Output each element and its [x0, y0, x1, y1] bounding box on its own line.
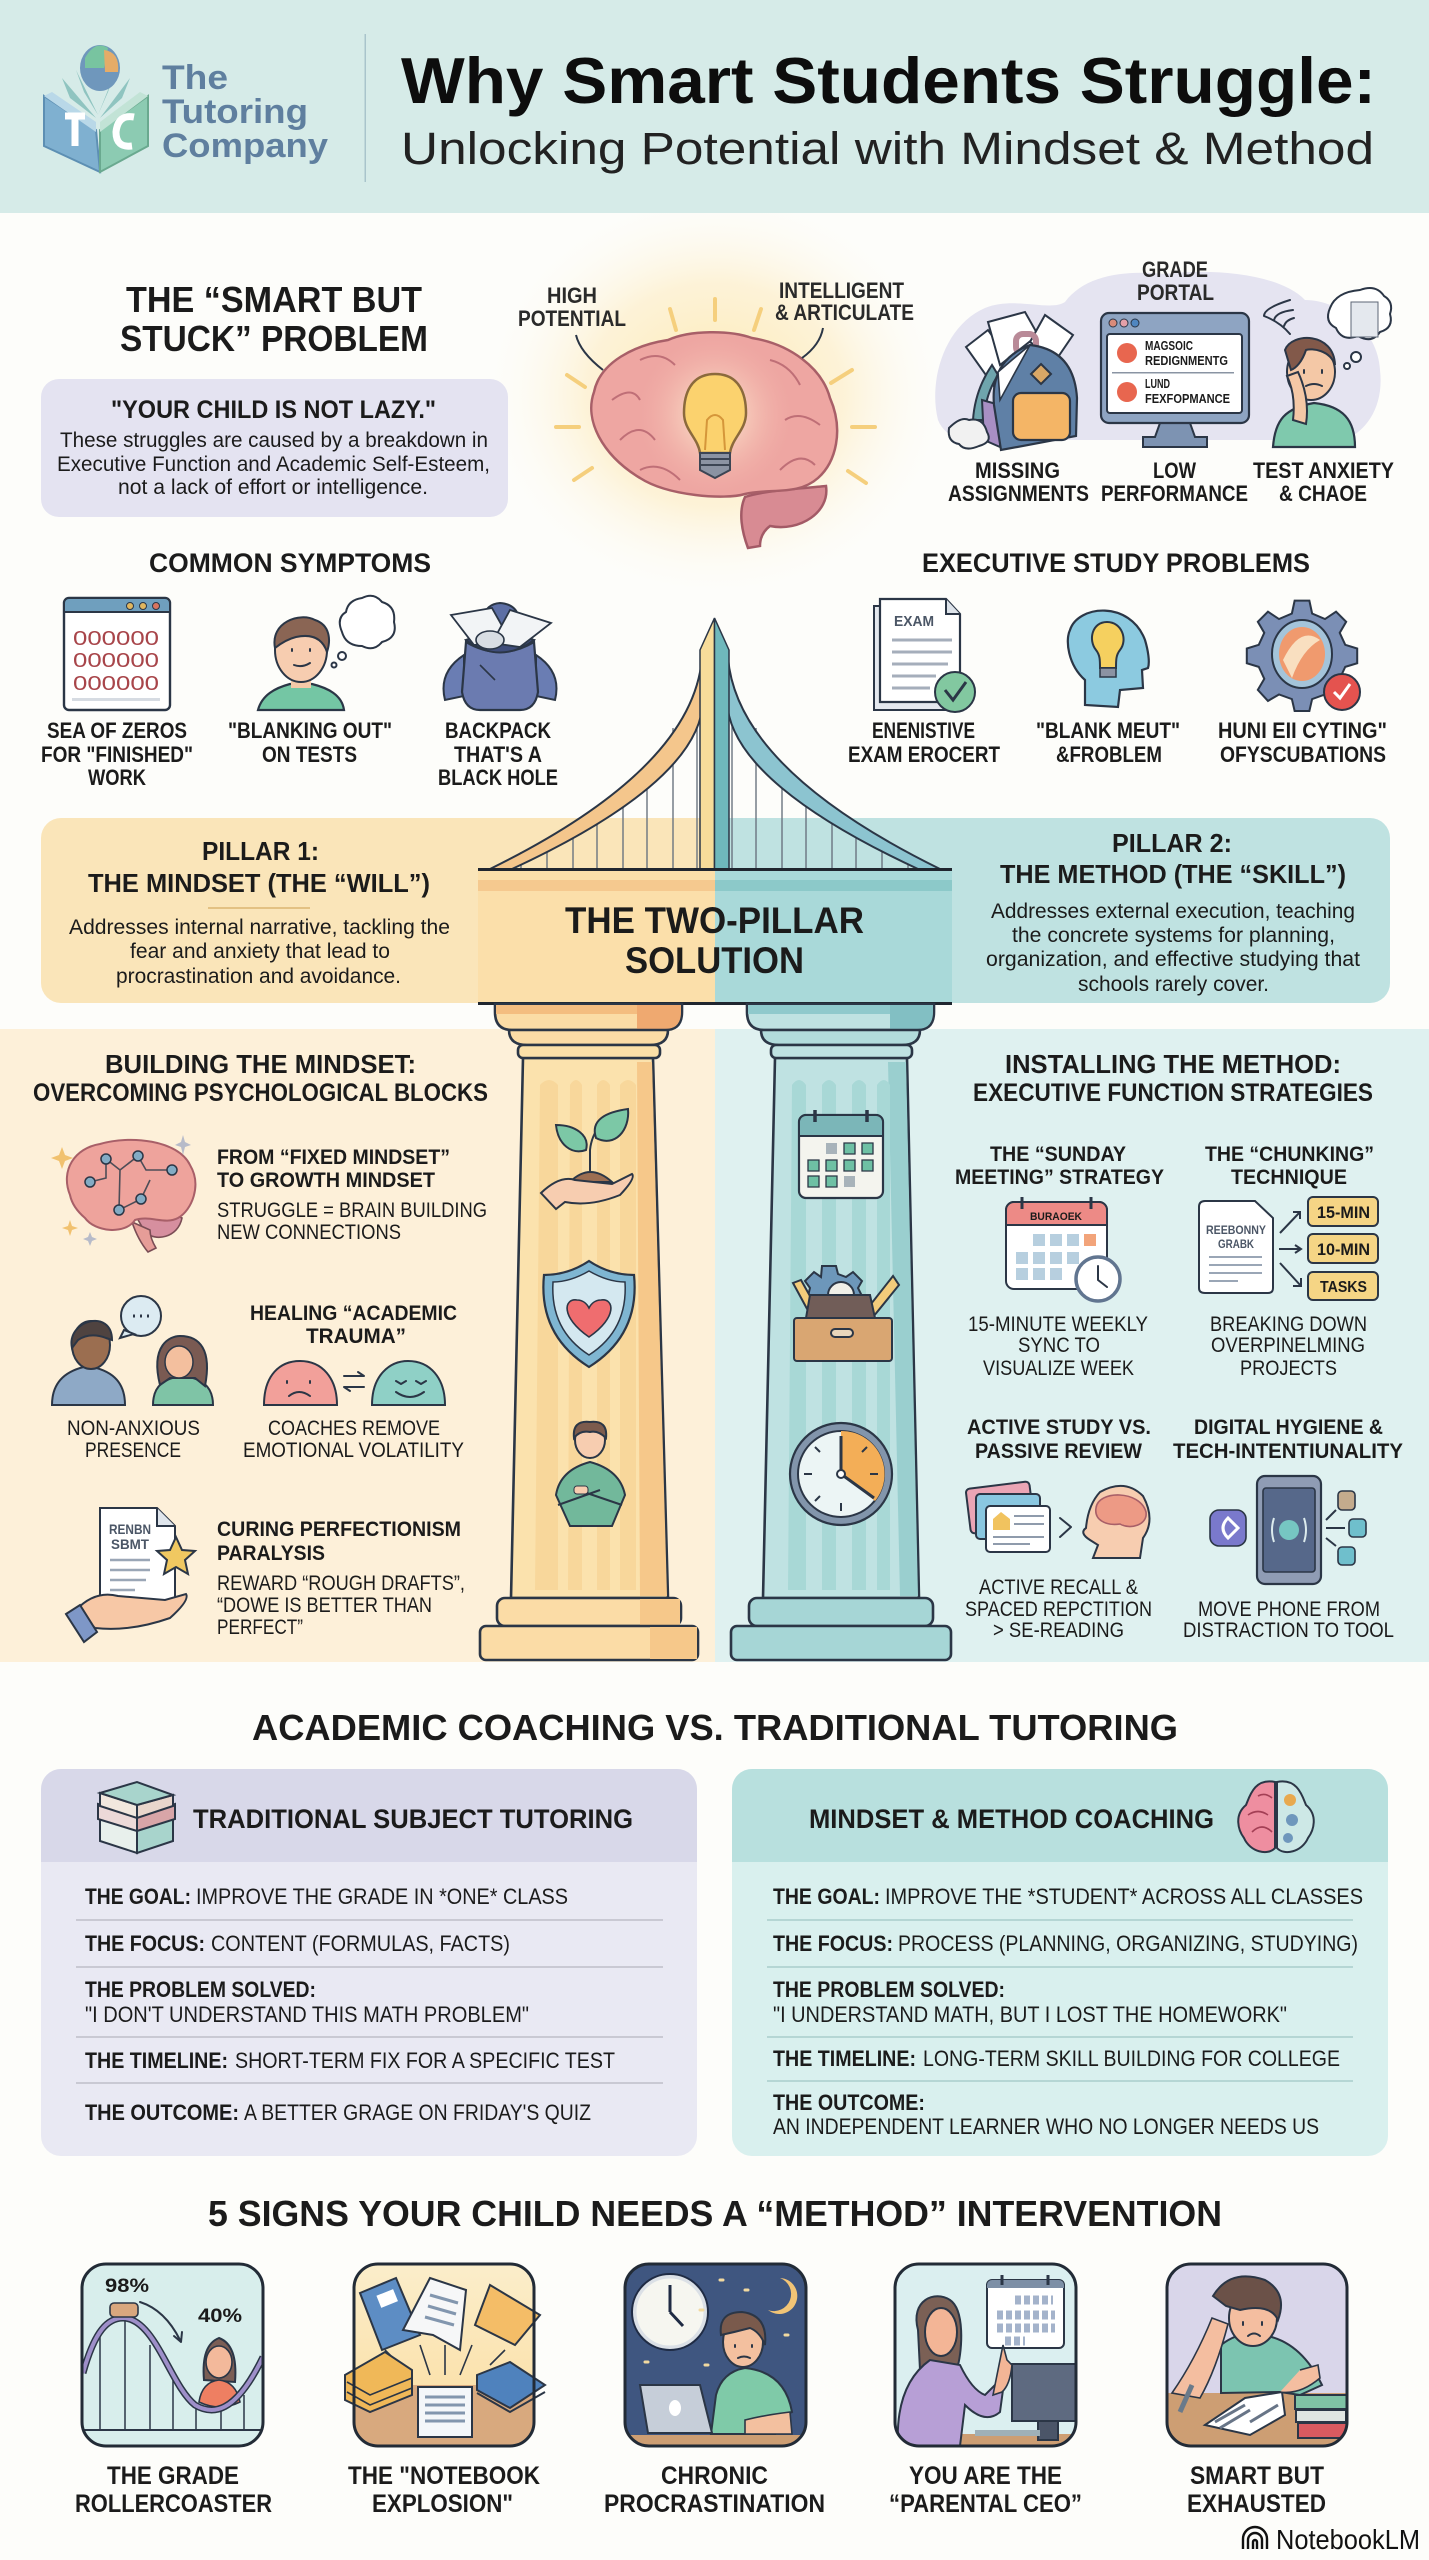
illustration: grade portal scene: [935, 257, 1394, 506]
right pillar: [731, 1004, 951, 1660]
heading: THE METHOD (THE “SKILL”): [1000, 859, 1346, 889]
heading: THE MINDSET (THE “WILL”): [88, 868, 430, 898]
heading: INSTALLING THE METHOD:: [1005, 1049, 1341, 1079]
label: coaches remove emotional volatility: COACHES REMOVE: [268, 1417, 440, 1440]
section background: method: [715, 1029, 1429, 1662]
label: intelligent and articulate: [775, 278, 914, 325]
label: ROLLERCOASTER: [75, 2490, 272, 2518]
illustration: late night at laptop: [625, 2264, 806, 2446]
icon: sea of zeros browser: 000000: [73, 628, 159, 650]
heading: TRADITIONAL SUBJECT TUTORING: [193, 1804, 633, 1834]
text: fixed to growth mindset: TO GROWTH MINDSET: [217, 1169, 435, 1192]
comparison rows: "I UNDERSTAND MATH, BUT I LOST THE HOMEWORK": [773, 2002, 1287, 2027]
label: [889, 2462, 1082, 2518]
heading: THE “SUNDAY: [990, 1143, 1126, 1166]
label: low performance: LOW: [1153, 458, 1196, 483]
central title: THE TWO-PILLAR: [565, 900, 864, 941]
label: “PARENTAL CEO”: [889, 2490, 1082, 2518]
label: grade portal: [1137, 257, 1214, 305]
header band: [0, 0, 1429, 213]
title: Why Smart Students Struggle:: [401, 44, 1376, 117]
text: curing perfectionism paralysis: PERFECT”: [217, 1616, 303, 1639]
label: enenistive exam erocert: [848, 718, 1000, 767]
cloud backdrop: [935, 272, 1381, 440]
heading: [88, 836, 430, 898]
icon: calendar with clock: BURAOEK: [1030, 1211, 1082, 1223]
sign 3: chronic procrastination: [604, 2264, 825, 2518]
heading: THE “SMART BUT: [126, 279, 422, 320]
description: procrastination and avoidance.: [116, 965, 401, 988]
icon: rough draft in hand: [66, 1508, 195, 1642]
icon: anxious student: [1264, 288, 1391, 447]
comparison rows: [76, 1884, 663, 2125]
icon: confident student: [556, 1422, 625, 1526]
comparison rows: A BETTER GRAGE ON FRIDAY'S QUIZ: [244, 2100, 591, 2125]
heading: [967, 1416, 1151, 1463]
callout: your child is not lazy: not a lack of effort or intelligence.: [118, 476, 428, 499]
illustration: rollercoaster: [82, 2264, 263, 2446]
callout: your child is not lazy: Executive Function and Academic Self-Esteem,: [57, 453, 490, 476]
description: the concrete systems for planning,: [1012, 924, 1335, 947]
heading: THE “CHUNKING”: [1205, 1143, 1374, 1166]
description: [968, 1313, 1148, 1380]
text: healing academic trauma: TRAUMA”: [306, 1325, 406, 1348]
sign 4: parental ceo: [889, 2264, 1082, 2518]
heading: STUCK” PROBLEM: [120, 318, 428, 359]
description: fear and anxiety that lead to: [130, 940, 390, 963]
description: ACTIVE RECALL &: [979, 1576, 1138, 1599]
heading: EXECUTIVE FUNCTION STRATEGIES: [973, 1079, 1373, 1107]
icon: calendar with clock: [1006, 1197, 1120, 1301]
text: curing perfectionism paralysis: REWARD “ROUGH DRAFTS”,: [217, 1572, 465, 1595]
comparison rows: THE OUTCOME:: [773, 2090, 925, 2115]
heading: ACTIVE STUDY VS.: [967, 1416, 1151, 1439]
label: enenistive exam erocert: ENENISTIVE: [872, 718, 975, 743]
panel: building the mindset: [33, 1049, 488, 1642]
item: digital hygiene: [1173, 1416, 1403, 1642]
description: DISTRACTION TO TOOL: [1183, 1619, 1394, 1642]
label: coaches remove emotional volatility: [243, 1417, 464, 1462]
section background: mindset: [0, 1029, 715, 1662]
comparison rows: "I DON'T UNDERSTAND THIS MATH PROBLEM": [85, 2002, 529, 2027]
description: schools rarely cover.: [1078, 973, 1269, 996]
item: active study vs passive review: [965, 1416, 1152, 1642]
panel: mindset and method coaching: [732, 1769, 1388, 2156]
label: backpack black hole: BLACK HOLE: [438, 765, 558, 790]
logo wordmark: Company: [162, 127, 328, 165]
label: non-anxious presence: PRESENCE: [85, 1439, 181, 1462]
text: curing perfectionism paralysis: “DOWE IS BETTER THAN: [217, 1594, 432, 1617]
description: > SE-READING: [993, 1619, 1124, 1642]
text: curing perfectionism paralysis: PARALYSIS: [217, 1542, 325, 1565]
label: test anxiety and chaoe: TEST ANXIETY: [1253, 458, 1394, 483]
icon: sea of zeros browser: [64, 598, 170, 710]
comparison rows: SHORT-TERM FIX FOR A SPECIFIC TEST: [235, 2048, 615, 2073]
logo wordmark: [162, 59, 328, 165]
left pillar: [480, 1004, 698, 1660]
description: [1210, 1313, 1367, 1380]
icon: notebooklm arcs: [1243, 2527, 1267, 2549]
heading: PASSIVE REVIEW: [975, 1440, 1142, 1463]
comparison rows: THE FOCUS:: [773, 1931, 893, 1956]
label: intelligent and articulate: INTELLIGENT: [779, 278, 904, 303]
illustration: rollercoaster: 98%: [105, 2276, 149, 2297]
heading: [1205, 1143, 1374, 1189]
label: backpack black hole: BACKPACK: [445, 718, 551, 743]
logo wordmark: The: [162, 59, 228, 97]
label: backpack black hole: [438, 718, 558, 790]
subtitle: Unlocking Potential with Mindset & Method: [401, 123, 1374, 174]
label: sea of zeros: FOR "FINISHED": [41, 742, 193, 767]
icon: head with bulb: [1068, 611, 1149, 707]
icon: document split into chunks: 10-MIN: [1317, 1240, 1370, 1259]
icon: calendar: [799, 1110, 883, 1198]
item: sunday meeting strategy: [955, 1143, 1164, 1380]
description: SPACED REPCTITION: [965, 1598, 1152, 1621]
comparison rows: LONG-TERM SKILL BUILDING FOR COLLEGE: [923, 2046, 1340, 2071]
label: sea of zeros: [41, 718, 193, 790]
panel: smart but stuck problem: [41, 279, 508, 517]
description: Addresses external execution, teaching: [991, 900, 1355, 923]
heading: OVERCOMING PSYCHOLOGICAL BLOCKS: [33, 1079, 488, 1107]
label: low performance: [1101, 458, 1248, 506]
illustration: tired student at desk: [1167, 2264, 1347, 2446]
label: non-anxious presence: [67, 1417, 200, 1462]
heading: TECHNIQUE: [1231, 1166, 1347, 1189]
comparison rows: THE FOCUS:: [85, 1931, 205, 1956]
description: [1183, 1598, 1394, 1642]
icon: coach and student: [52, 1296, 213, 1405]
text: healing academic trauma: HEALING “ACADEMIC: [250, 1302, 457, 1325]
description: BREAKING DOWN: [1210, 1313, 1367, 1336]
text: fixed to growth mindset: NEW CONNECTIONS: [217, 1221, 401, 1244]
description: VISUALIZE WEEK: [983, 1357, 1134, 1380]
icon: exam paper: [874, 599, 975, 712]
text: fixed to growth mindset: [217, 1146, 487, 1244]
description: OVERPINELMING: [1211, 1334, 1365, 1357]
logo wordmark: Tutoring: [162, 93, 308, 131]
heading: [973, 1049, 1373, 1107]
heading: TECH-INTENTIUNALITY: [1173, 1440, 1403, 1463]
icon: computer monitor: MAGSOIC: [1145, 338, 1193, 353]
heading: COMMON SYMPTOMS: [149, 548, 431, 578]
description: MOVE PHONE FROM: [1198, 1598, 1380, 1621]
central title: [565, 900, 864, 981]
icon: computer monitor: REDIGNMENTG: [1145, 353, 1228, 368]
icon: computer monitor: LUND: [1145, 376, 1170, 391]
icon: computer monitor: [1101, 313, 1249, 447]
label: non-anxious presence: NON-ANXIOUS: [67, 1417, 200, 1440]
panel: executive study problems: [848, 548, 1387, 767]
comparison rows: THE GOAL:: [773, 1884, 880, 1909]
panel: pillar 1 card: [41, 818, 715, 1003]
comparison rows: IMPROVE THE GRADE IN *ONE* CLASS: [196, 1884, 568, 1909]
heading: [33, 1049, 488, 1107]
label: high potential: [518, 283, 626, 331]
label: blanking out: ON TESTS: [262, 742, 357, 767]
label: YOU ARE THE: [909, 2462, 1062, 2490]
heading: MEETING” STRATEGY: [955, 1166, 1164, 1189]
icon: overflowing backpack: [444, 603, 556, 710]
icon: rough draft in hand: RENBN: [109, 1521, 151, 1537]
label: grade portal: GRADE: [1142, 257, 1208, 282]
text: fixed to growth mindset: FROM “FIXED MINDSET”: [217, 1146, 450, 1169]
label: [604, 2462, 825, 2518]
label: PROCRASTINATION: [604, 2490, 825, 2518]
label: test anxiety and chaoe: [1253, 458, 1394, 506]
icon: sea of zeros browser: 000000: [73, 673, 159, 695]
panel: pillar 2 card: [715, 818, 1390, 1003]
comparison rows: THE TIMELINE:: [85, 2048, 228, 2073]
callout: your child is not lazy: [41, 379, 508, 517]
label: low performance: PERFORMANCE: [1101, 481, 1248, 506]
icon: stack of books: [98, 1782, 175, 1853]
central title: SOLUTION: [625, 940, 804, 981]
sign 5: smart but exhausted: [1167, 2264, 1347, 2518]
logo: The Tutoring Company: [44, 45, 328, 172]
comparison rows: CONTENT (FORMULAS, FACTS): [211, 1931, 510, 1956]
sign 2: notebook explosion: [345, 2264, 545, 2518]
label: THE GRADE: [107, 2462, 239, 2490]
icon: backpack with papers: [949, 312, 1077, 450]
icon: phone with app nodes: [1210, 1476, 1366, 1584]
icon: document split into chunks: [1199, 1197, 1378, 1300]
description: [69, 916, 450, 988]
heading: PILLAR 2:: [1112, 828, 1232, 858]
heading: [955, 1143, 1164, 1189]
icon: shield with heart: [543, 1261, 635, 1367]
description: organization, and effective studying that: [986, 948, 1360, 971]
bridge over pillars: [478, 618, 952, 1005]
comparison rows: THE TIMELINE:: [773, 2046, 916, 2071]
icon: neural brain: [51, 1135, 195, 1252]
label: CHRONIC: [661, 2462, 768, 2490]
heading: [1000, 828, 1346, 889]
heading: [120, 279, 428, 359]
heading: DIGITAL HYGIENE &: [1194, 1416, 1383, 1439]
comparison rows: THE GOAL:: [85, 1884, 191, 1909]
icon: blanking out student: [258, 596, 395, 710]
item: chunking technique: [1199, 1143, 1378, 1380]
label: [1187, 2462, 1326, 2518]
icon: toolbox with gear and pencils: [793, 1266, 899, 1361]
icon: computer monitor: FEXFOPMANCE: [1145, 391, 1230, 406]
description: SYNC TO: [1018, 1334, 1100, 1357]
icon: document split into chunks: GRABK: [1218, 1237, 1254, 1251]
icon: sea of zeros browser: 000000: [73, 650, 159, 672]
label: high potential: HIGH: [547, 283, 597, 308]
icon: rough draft in hand: SBMT: [111, 1536, 149, 1552]
label: blanking out: [228, 718, 392, 767]
label: backpack black hole: THAT'S A: [454, 742, 542, 767]
icon: document split into chunks: 15-MIN: [1317, 1203, 1370, 1222]
icon: document split into chunks: REEBONNY: [1206, 1223, 1266, 1237]
label: missing assignments: ASSIGNMENTS: [948, 481, 1089, 506]
text: fixed to growth mindset: STRUGGLE = BRAIN BUILDING: [217, 1199, 487, 1222]
label: missing assignments: [948, 458, 1089, 506]
label: SMART BUT: [1190, 2462, 1324, 2490]
description: [986, 900, 1360, 996]
heading: BUILDING THE MINDSET:: [105, 1049, 416, 1079]
label: high potential: POTENTIAL: [518, 306, 626, 331]
label: EXHAUSTED: [1187, 2490, 1326, 2518]
label: grade portal: PORTAL: [1137, 280, 1214, 305]
callout: your child is not lazy: "YOUR CHILD IS NOT LAZY.": [111, 396, 436, 424]
panel: common symptoms: [41, 548, 558, 790]
comparison rows: THE OUTCOME:: [85, 2100, 239, 2125]
illustration: parent pointing at calendar: [895, 2264, 1076, 2446]
label: [348, 2462, 540, 2518]
label: missing assignments: MISSING: [975, 458, 1060, 483]
icon: two-sided brain: [1238, 1781, 1314, 1852]
icon: document split into chunks: TASKS: [1320, 1279, 1367, 1296]
label: intelligent and articulate: & ARTICULATE: [775, 300, 914, 325]
illustration: notebook explosion: [345, 2264, 545, 2446]
label: blank meut problem: &FROBLEM: [1056, 742, 1162, 767]
icon: sad to calm faces: [264, 1361, 445, 1405]
label: sea of zeros: SEA OF ZEROS: [47, 718, 187, 743]
comparison heading: ACADEMIC COACHING VS. TRADITIONAL TUTORING: [252, 1707, 1178, 1748]
label: THE "NOTEBOOK: [348, 2462, 540, 2490]
description: 15-MINUTE WEEKLY: [968, 1313, 1148, 1336]
comparison rows: PROCESS (PLANNING, ORGANIZING, STUDYING): [898, 1931, 1358, 1956]
label: EXPLOSION": [372, 2490, 513, 2518]
label: huni eii cyting: [1218, 718, 1387, 767]
icon: seedling in hand: [541, 1109, 633, 1209]
description: [965, 1576, 1152, 1642]
comparison rows: THE PROBLEM SOLVED:: [773, 1977, 1005, 2002]
label: blank meut problem: "BLANK MEUT": [1036, 718, 1180, 743]
panel: installing the method: [955, 1049, 1403, 1642]
label: enenistive exam erocert: EXAM EROCERT: [848, 742, 1000, 767]
icon: gear with check: [1247, 601, 1360, 711]
comparison rows: THE PROBLEM SOLVED:: [85, 1977, 316, 2002]
comparison rows: [767, 1884, 1363, 2139]
panel: traditional subject tutoring: [41, 1769, 697, 2156]
illustration: rollercoaster: 40%: [198, 2306, 242, 2327]
text: curing perfectionism paralysis: [217, 1518, 465, 1639]
label: blanking out: "BLANKING OUT": [228, 718, 392, 743]
comparison rows: AN INDEPENDENT LEARNER WHO NO LONGER NEEDS US: [773, 2114, 1319, 2139]
sign 1: grade rollercoaster: [75, 2264, 272, 2518]
label: [75, 2462, 272, 2518]
heading: [1173, 1416, 1403, 1463]
icon: open book with brain: [44, 45, 148, 172]
label: huni eii cyting: HUNI EII CYTING": [1218, 718, 1387, 743]
label: test anxiety and chaoe: & CHAOE: [1279, 481, 1367, 506]
text: curing perfectionism paralysis: CURING PERFECTIONISM: [217, 1518, 461, 1541]
description: PROJECTS: [1240, 1357, 1337, 1380]
icon: exam paper: EXAM: [894, 613, 934, 630]
heading: PILLAR 1:: [202, 836, 319, 866]
text: healing academic trauma: [250, 1302, 457, 1348]
description: Addresses internal narrative, tackling the: [69, 916, 450, 939]
heading: EXECUTIVE STUDY PROBLEMS: [922, 548, 1310, 578]
label: sea of zeros: WORK: [88, 765, 146, 790]
label: coaches remove emotional volatility: EMOTIONAL VOLATILITY: [243, 1439, 464, 1462]
label: huni eii cyting: OFYSCUBATIONS: [1220, 742, 1386, 767]
brain with lightbulb: [518, 278, 914, 548]
icon: clock: [790, 1423, 892, 1525]
heading: MINDSET & METHOD COACHING: [809, 1804, 1214, 1834]
five signs heading: 5 SIGNS YOUR CHILD NEEDS A “METHOD” INTERVENTION: [208, 2193, 1222, 2234]
comparison rows: IMPROVE THE *STUDENT* ACROSS ALL CLASSES: [885, 1884, 1363, 1909]
label: blank meut problem: [1036, 718, 1180, 767]
icon: flashcards to head: [966, 1481, 1150, 1558]
callout: your child is not lazy: These struggles are caused by a breakdown in: [60, 429, 488, 452]
